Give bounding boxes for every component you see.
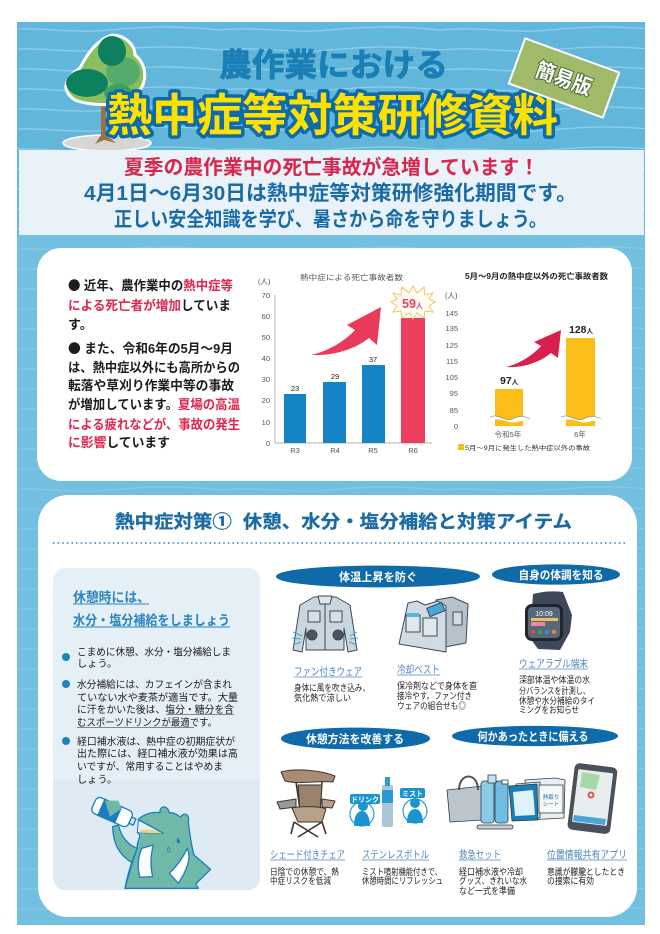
- panel: rest advice: [53, 568, 260, 890]
- item: first aid kit text: 救急セット: [459, 848, 501, 861]
- text block: explanation: が増加しています。夏場の高温: [68, 397, 240, 412]
- item: first aid kit text: 経口補水液や冷却: [459, 866, 523, 877]
- bar chart: non-heatstroke deaths: 135: [445, 324, 458, 333]
- item: fan jacket text: 身体に風を吹き込み、: [294, 682, 370, 693]
- bar chart: non-heatstroke deaths: 128人: [569, 324, 594, 336]
- bar chart: non-heatstroke deaths: 令和5年: [495, 429, 522, 439]
- advice bullets: ていない水や麦茶が適当です。大量: [77, 691, 238, 704]
- subtitle text block: [84, 155, 577, 231]
- axis break wave: [490, 416, 601, 422]
- legend: 5月～9月に発生した熱中症以外の事故: [465, 443, 591, 452]
- bar chart: heatstroke deaths: 37: [369, 355, 377, 364]
- item: fan jacket text: [294, 665, 370, 703]
- item: fan jacket text: 気化熱で涼しい: [294, 692, 351, 703]
- item: cooling vest text: ウェアの組合せも◎: [397, 700, 466, 711]
- pill: prepare for emergencies: [452, 726, 618, 746]
- pill: know your condition: 自身の体調を知る: [518, 568, 604, 582]
- advice bullets: しょう。: [77, 658, 117, 670]
- dotted divider: [53, 542, 626, 544]
- text block: explanation: 転落や草刈り作業中等の事故: [68, 378, 234, 393]
- pill: prevent body temp rise: [276, 566, 480, 587]
- bar chart: non-heatstroke deaths: 6年: [574, 429, 586, 439]
- advice bullets: [62, 646, 238, 786]
- advice bullets: しょう。: [77, 774, 117, 786]
- bar chart: heatstroke deaths: R4: [330, 446, 340, 455]
- title: line 2: 熱中症等対策研修資料: [107, 90, 558, 141]
- advice bullets: 出た際には、経口補水液が効果は高: [77, 747, 238, 760]
- bar chart: heatstroke deaths: 10: [262, 418, 270, 427]
- bar chart: heatstroke deaths: 0: [266, 439, 270, 448]
- bar chart: heatstroke deaths: 50: [262, 333, 270, 342]
- bar chart: heatstroke deaths: 29: [331, 372, 339, 381]
- item: shade chair text: シェード付きチェア: [270, 848, 345, 861]
- drink label: ドリンク: [351, 795, 379, 804]
- bar chart: heatstroke deaths: 70: [262, 291, 270, 300]
- item: wearable text: 休憩や水分補給のタイ: [519, 695, 595, 706]
- bar chart: non-heatstroke deaths: 115: [446, 357, 458, 366]
- icon: first aid kit: 熱取り: [543, 793, 559, 801]
- item: stainless bottle text: ミスト噴射機能付きで、: [362, 866, 442, 877]
- text block: explanation: ● また、令和6年の5月～9月: [68, 338, 233, 357]
- bar chart: heatstroke deaths: R5: [368, 446, 378, 455]
- pill: prepare for emergencies: 何かあったときに備える: [478, 730, 588, 744]
- item: stainless bottle text: ステンレスボトル: [362, 849, 429, 861]
- bar chart: non-heatstroke deaths: 5月～9月の熱中症以外の死亡事故者数: [465, 271, 608, 281]
- legend: [458, 443, 591, 452]
- item: shade chair text: 中症リスクを低減: [270, 875, 331, 886]
- advice bullets: に汗をかいた後は、塩分・糖分を含: [77, 703, 234, 716]
- bar chart: non-heatstroke deaths: 85: [450, 406, 458, 415]
- advice bullets: いですが、常用することはやめま: [77, 760, 223, 773]
- arrow: rising trend: [311, 307, 381, 355]
- subtitle text block: 夏季の農作業中の死亡事故が急増しています！: [124, 155, 539, 179]
- bar chart: heatstroke deaths: 30: [262, 375, 270, 384]
- icon: tree: [19, 35, 199, 156]
- icon: shade chair: [277, 770, 335, 837]
- advice bullets: こまめに休憩、水分・塩分補給しま: [77, 646, 231, 658]
- icon: cooling vest: [399, 597, 468, 652]
- bar chart: non-heatstroke deaths: 0: [454, 422, 458, 431]
- bar chart: non-heatstroke deaths: 125: [445, 341, 458, 350]
- item: location app text: [547, 848, 627, 886]
- text block: explanation: [68, 275, 240, 450]
- item: first aid kit text: [459, 848, 527, 896]
- item: cooling vest text: 接冷やす。ファン付き: [397, 690, 472, 701]
- bar chart: heatstroke deaths: R3: [290, 446, 300, 455]
- panel: statistics: [37, 248, 632, 481]
- badge: simplified edition: [509, 38, 619, 118]
- item: location app text: 意識が朦朧としたとき: [547, 866, 625, 877]
- rest advice heading: 休憩時には、: [73, 589, 150, 605]
- icon: fan jacket: [292, 596, 358, 652]
- text block: explanation: による疲れなどが、事故の発生: [68, 417, 240, 432]
- item: cooling vest text: 保冷剤などで身体を直: [397, 680, 477, 691]
- text block: explanation: による死亡者が増加していま: [68, 298, 231, 313]
- item: wearable text: [519, 657, 595, 715]
- item: wearable text: ウェアラブル端末: [519, 657, 588, 670]
- advice bullets: 経口補水液は、熱中症の初期症状が: [77, 735, 235, 748]
- icon: smartwatch: [525, 591, 572, 650]
- text block: explanation: は、熱中症以外にも高所からの: [68, 360, 240, 375]
- item: stainless bottle text: [362, 849, 443, 886]
- bar chart: non-heatstroke deaths: 105: [445, 373, 458, 382]
- item: first aid kit text: など一式を準備: [459, 885, 515, 896]
- text block: explanation: ● 近年、農作業中の熱中症等: [68, 275, 233, 294]
- pill: improve rest: [281, 728, 430, 749]
- bar chart: non-heatstroke deaths: [445, 271, 608, 452]
- bar chart: non-heatstroke deaths: 95: [450, 389, 458, 398]
- pill: know your condition: [492, 564, 620, 585]
- bar chart: heatstroke deaths: 20: [262, 396, 270, 405]
- text block: explanation: す。: [68, 317, 93, 332]
- item: wearable text: 分バランスを計測し、: [519, 685, 590, 696]
- bar chart: heatstroke deaths: 60: [262, 312, 270, 321]
- icon: first aid kit: [447, 775, 565, 829]
- arrow: rising trend: [506, 330, 561, 367]
- pill: improve rest: 休憩方法を改善する: [306, 732, 404, 746]
- icon: frog drinking water: [90, 796, 211, 888]
- bar chart: heatstroke deaths: (人): [258, 277, 271, 286]
- item: stainless bottle text: 休憩時間にリフレッシュ: [362, 875, 443, 886]
- item: shade chair text: 日陰での休憩で、熱: [270, 866, 339, 877]
- bar chart: heatstroke deaths: R6: [408, 446, 418, 455]
- callout: 59 people: [391, 286, 435, 319]
- callout: 59 people: 59人: [402, 297, 423, 311]
- rest advice heading: 水分・塩分補給をしましょう: [73, 612, 230, 628]
- item: cooling vest text: 冷却ベスト: [397, 664, 440, 676]
- item: shade chair text: [270, 848, 345, 886]
- bar chart: heatstroke deaths: [258, 272, 435, 455]
- badge: simplified edition: 簡易版: [532, 59, 595, 100]
- bar chart: heatstroke deaths: 23: [291, 384, 299, 393]
- panel: countermeasures: [38, 495, 637, 917]
- item: wearable text: 深部体温や体温の水: [519, 674, 590, 685]
- bar chart: heatstroke deaths: 熱中症による死亡事故者数: [300, 272, 404, 282]
- subtitle text block: 4月1日～6月30日は熱中症等対策研修強化期間です。: [84, 182, 577, 205]
- bar chart: non-heatstroke deaths: (人): [445, 291, 458, 300]
- icon: first aid kit: シート: [543, 802, 559, 808]
- heading: 熱中症対策① 休憩、水分・塩分補給と対策アイテム: [115, 512, 572, 532]
- icon: smartphone map: [567, 763, 618, 834]
- item: wearable text: ミングをお知らせ: [519, 704, 579, 715]
- text block: explanation: に影響しています: [68, 435, 170, 450]
- subtitle band background: [19, 150, 644, 235]
- item: cooling vest text: [397, 664, 477, 711]
- bar chart: non-heatstroke deaths: 145: [445, 309, 458, 318]
- title: line 1: 農作業における: [219, 47, 448, 83]
- pill: prevent body temp rise: 体温上昇を防ぐ: [339, 570, 417, 584]
- item: first aid kit text: グッズ、きれいな水: [459, 875, 527, 886]
- bar chart: non-heatstroke deaths: 97人: [500, 375, 519, 387]
- item: location app text: の捜索に有効: [547, 875, 594, 886]
- advice bullets: むスポーツドリンクが最適です。: [77, 716, 217, 729]
- rest advice heading: [73, 589, 230, 628]
- icon: smartwatch: 10:09: [535, 611, 553, 618]
- item: location app text: 位置情報共有アプリ: [547, 848, 627, 861]
- item: fan jacket text: ファン付きウェア: [294, 665, 362, 678]
- subtitle text block: 正しい安全知識を学び、暑さから命を守りましょう。: [114, 208, 547, 231]
- icon: mist bottle: [350, 777, 427, 827]
- mist label: ミスト: [402, 790, 423, 798]
- bar chart: heatstroke deaths: 40: [262, 354, 270, 363]
- advice bullets: 水分補給には、カフェインが含まれ: [77, 678, 232, 691]
- title: line 2: 熱中症等対策研修資料: [107, 90, 558, 141]
